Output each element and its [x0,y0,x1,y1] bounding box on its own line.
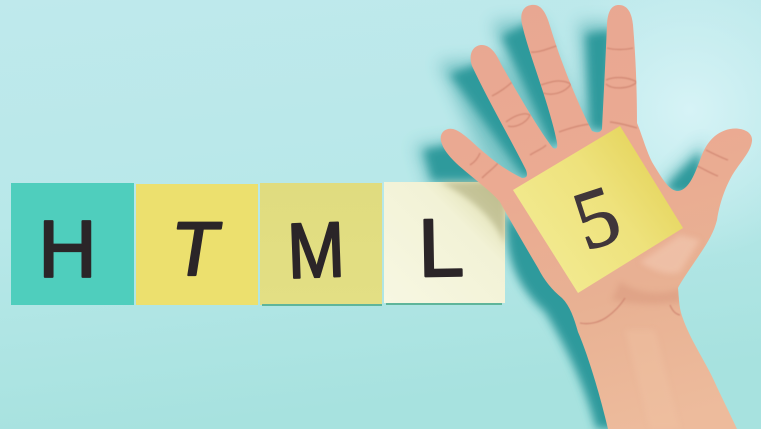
hand shading and creases [470,45,728,325]
sticky note T [136,184,258,305]
sticky note H [11,183,134,305]
sticky note 5 [513,126,683,293]
sticky note H: H [38,205,97,295]
sticky note 5: 5 [562,168,631,269]
sticky note M: M [286,205,346,295]
sticky note L [384,182,505,305]
sticky note T: T [166,207,226,292]
arm shadow [505,212,640,429]
hand shadows [415,20,705,429]
hand [441,5,752,429]
soft outer shadow [415,20,705,195]
sticky note M [260,183,382,306]
finger shadows [424,20,700,193]
sticky note L: L [417,203,465,294]
